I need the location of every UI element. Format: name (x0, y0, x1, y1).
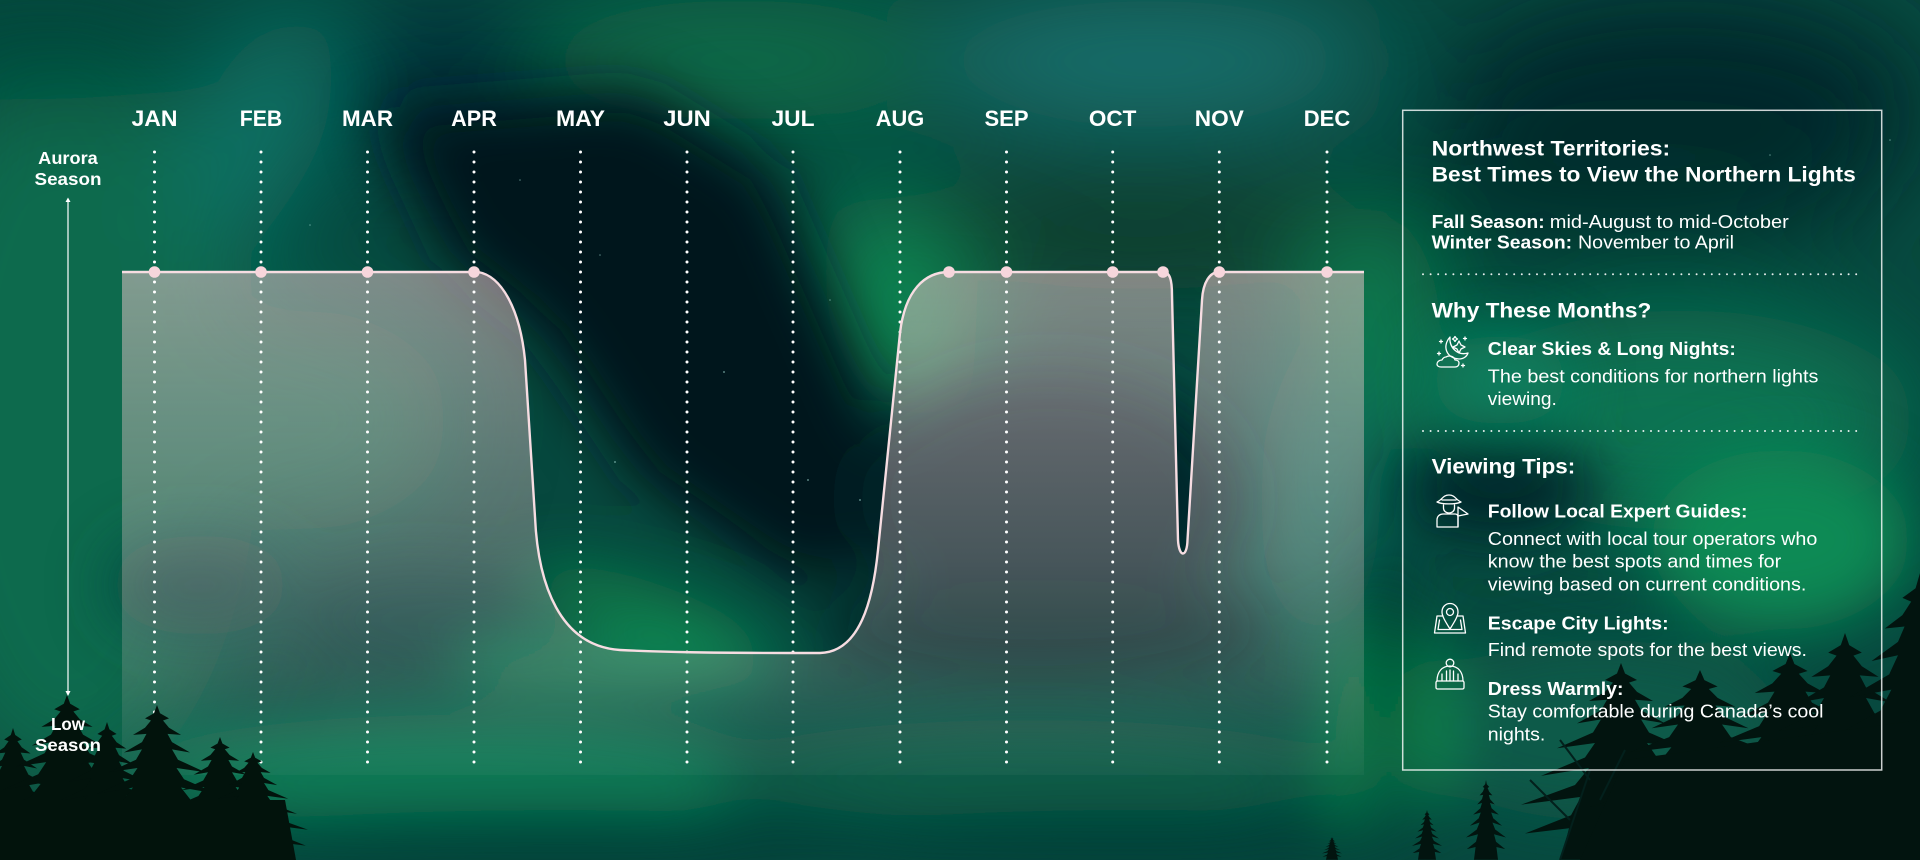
icon: guide with flag (1437, 495, 1468, 527)
icon: map pin (1434, 604, 1466, 633)
text: clear skies: Clear Skies & Long Nights: (1488, 338, 1736, 359)
y axis: aurora season to low season (34, 148, 102, 755)
season dates (1432, 211, 1789, 253)
axis label: low season (35, 714, 101, 755)
text: dress warmly: nights. (1488, 724, 1545, 745)
axis label: aurora season: Aurora (38, 148, 98, 168)
month labels: JAN (132, 106, 178, 131)
trees: bottom right (1322, 573, 1920, 860)
heading: Northwest Territories: (1432, 136, 1670, 160)
text: local guides (1488, 501, 1817, 594)
text: dress warmly: Dress Warmly: (1488, 678, 1624, 699)
text: local guides: viewing based on current conditions. (1488, 573, 1806, 594)
icon: beanie hat (1436, 659, 1464, 689)
trees: bottom left (0, 695, 308, 860)
month labels: SEP (984, 106, 1028, 131)
axis label: low season: Low (51, 714, 85, 734)
text: local guides: Follow Local Expert Guides: (1488, 501, 1747, 522)
panel: info box (1403, 110, 1882, 770)
heading: why these months: Why These Months? (1432, 298, 1651, 322)
text: local guides: Connect with local tour operators who (1488, 528, 1817, 549)
stars (309, 139, 1891, 501)
month labels: DEC (1304, 106, 1350, 131)
text: local guides: know the best spots and times for (1488, 551, 1781, 572)
icon: moon, stars and cloud (1437, 336, 1468, 367)
month labels (132, 106, 1350, 131)
text: clear skies: viewing. (1488, 388, 1557, 409)
month labels: JUN (663, 106, 711, 131)
text: city lights (1488, 612, 1807, 660)
month labels: FEB (240, 106, 282, 131)
month labels: APR (451, 106, 497, 131)
text: city lights: Find remote spots for the best views. (1488, 639, 1807, 660)
text: clear skies: The best conditions for northern lights (1488, 365, 1818, 386)
text: city lights: Escape City Lights: (1488, 612, 1669, 633)
axis label: aurora season (34, 148, 102, 189)
season dates: Winter Season: (1432, 232, 1572, 253)
curve markers (149, 266, 1333, 278)
season dates: Fall Season: (1432, 211, 1545, 232)
heading: viewing tips: Viewing Tips: (1432, 454, 1575, 478)
area fill under curve (122, 272, 1364, 775)
heading: Best Times to View the Northern Lights (1432, 163, 1856, 187)
axis label: aurora season: Season (34, 169, 102, 189)
text: dress warmly: Stay comfortable during Canada’s cool (1488, 701, 1824, 722)
month labels: MAY (556, 106, 605, 131)
axis label: low season: Season (35, 735, 101, 755)
season dates: mid-August to mid-October (1550, 211, 1789, 232)
month labels: AUG (876, 106, 924, 131)
axis arrow (66, 198, 70, 696)
month guide lines (154, 152, 1327, 772)
month labels: NOV (1195, 106, 1244, 131)
text: dress warmly (1488, 678, 1824, 745)
heading (1432, 136, 1856, 187)
season dates: November to April (1578, 232, 1734, 253)
curve line (122, 272, 1364, 653)
month labels: OCT (1089, 106, 1137, 131)
chart: aurora season curve (122, 152, 1364, 775)
text: clear skies (1488, 338, 1818, 409)
month labels: MAR (342, 106, 393, 131)
month labels: JUL (772, 106, 814, 131)
